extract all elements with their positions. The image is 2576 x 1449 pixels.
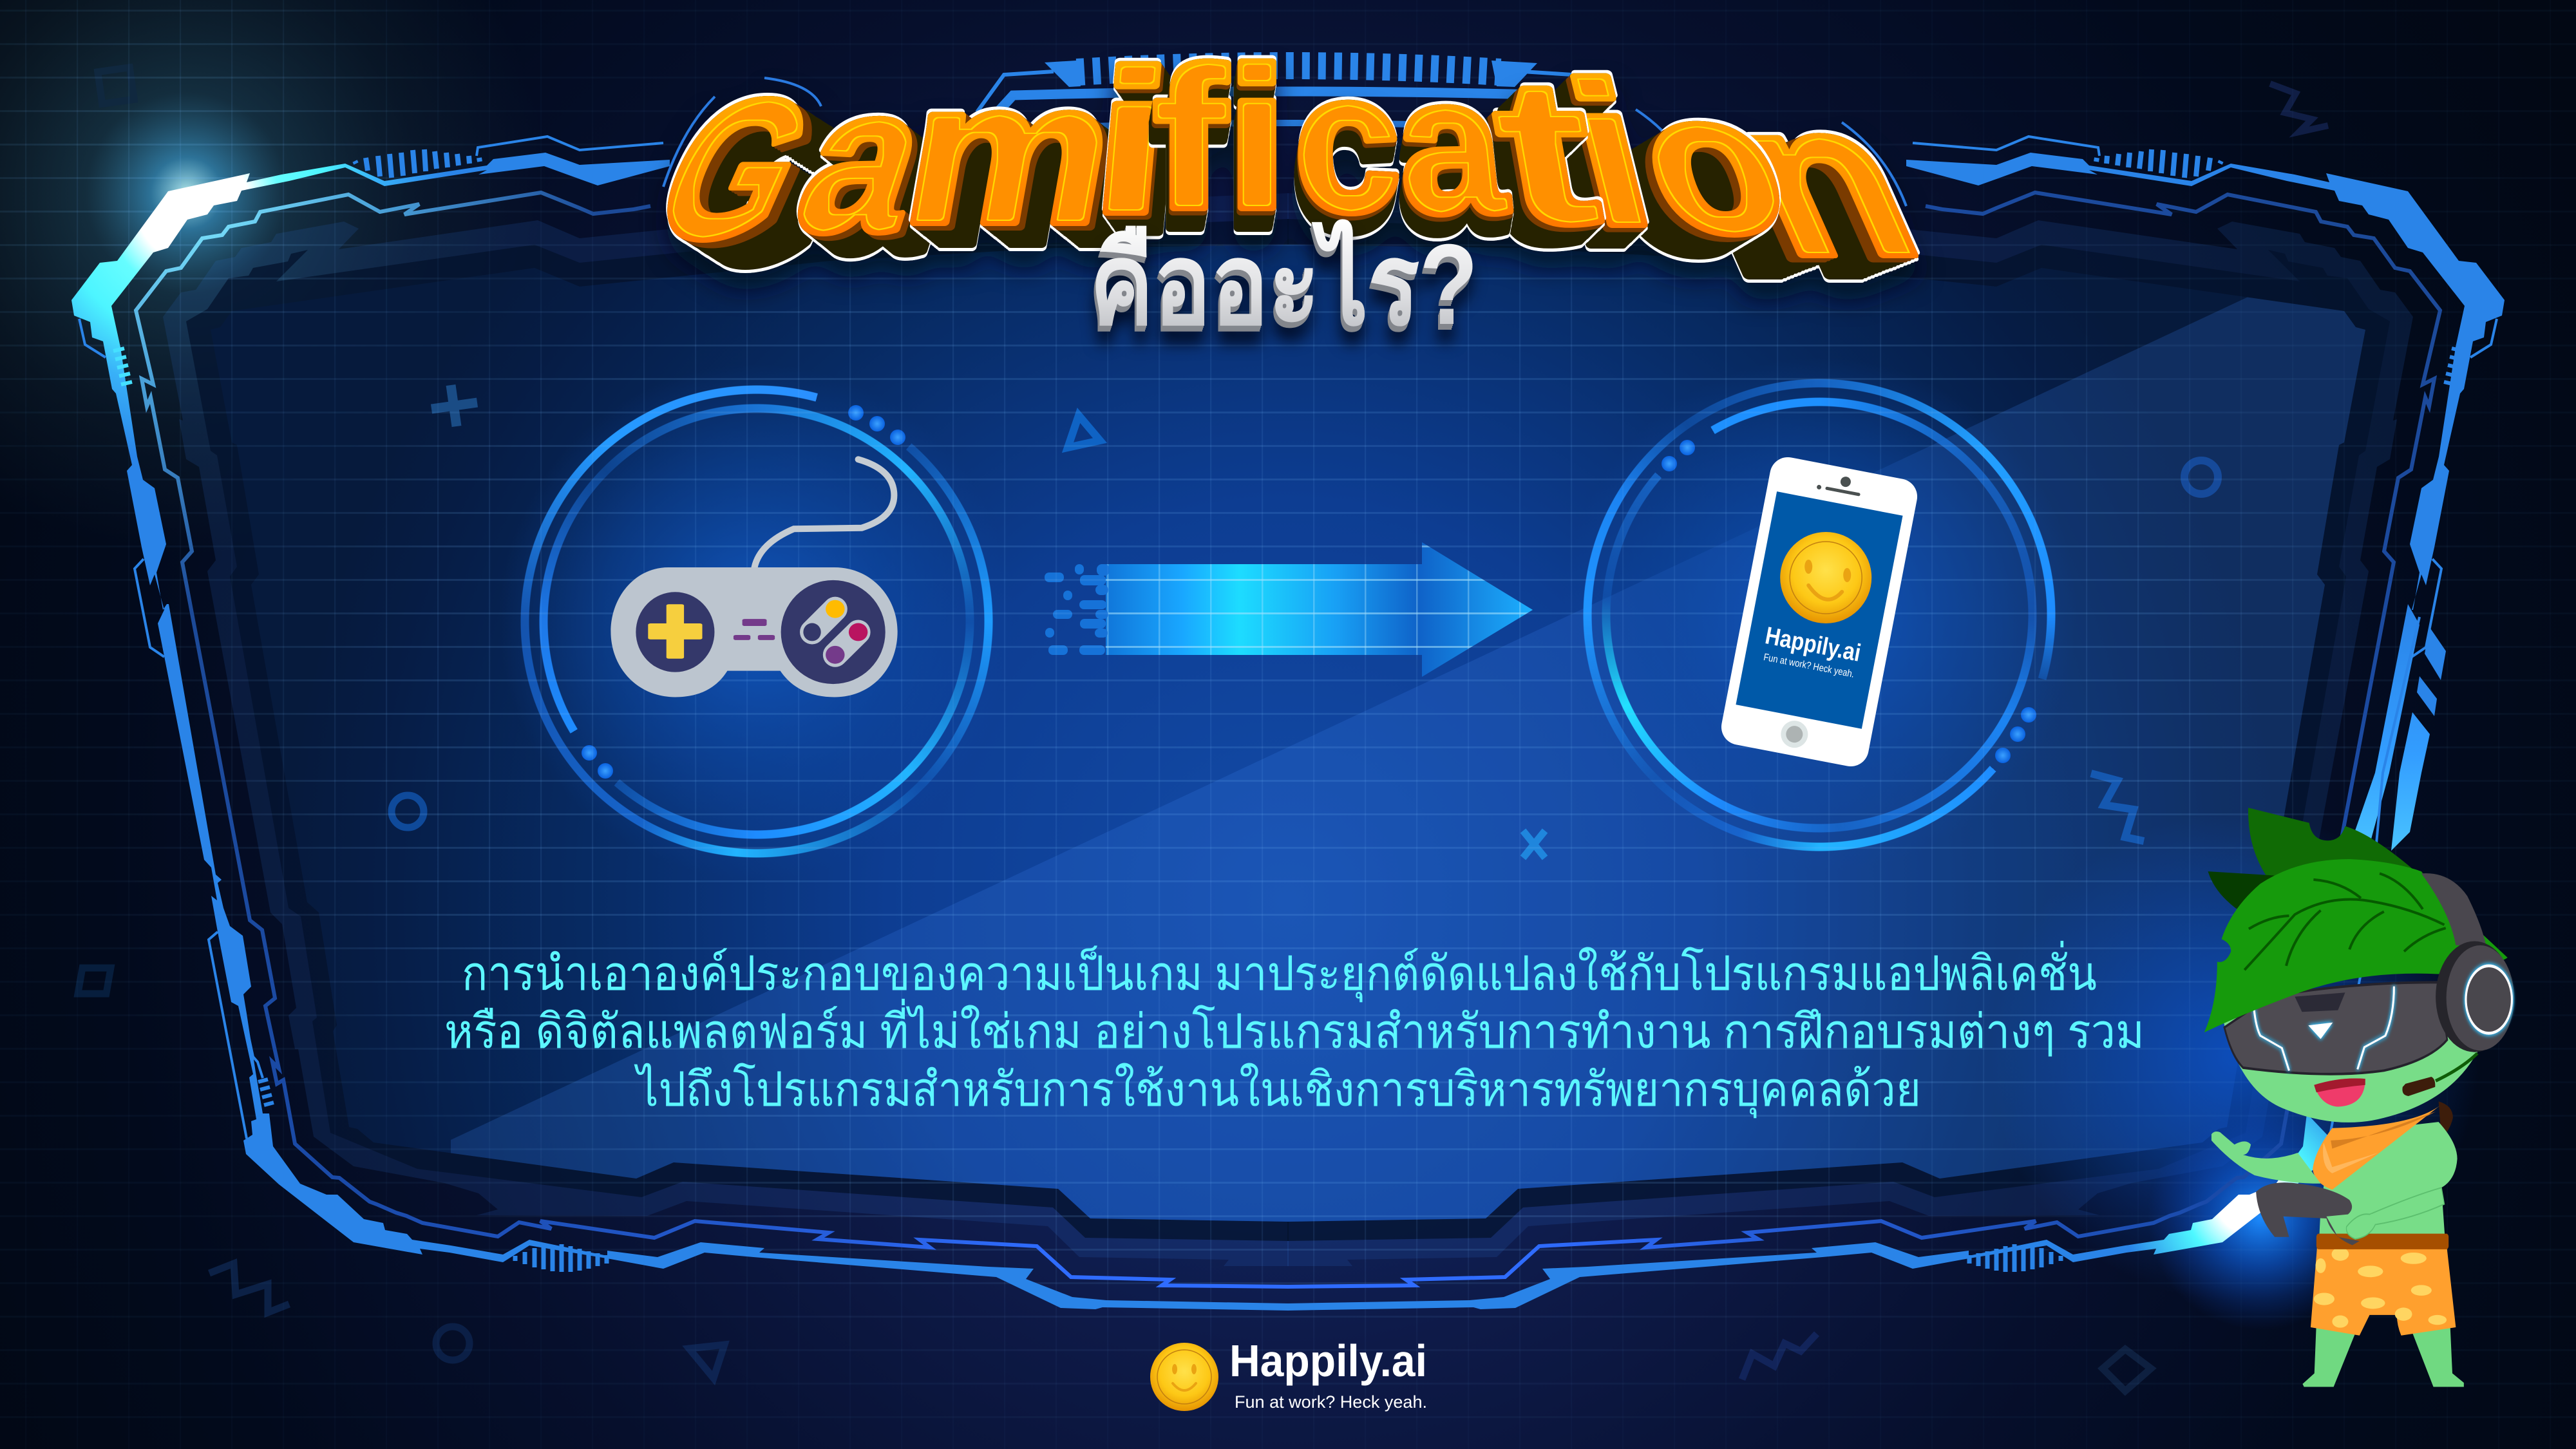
title: Gamification: a [1387, 37, 1514, 253]
icon: smartphone with Happily.ai app: Fun at work? Heck yeah. [1763, 652, 1855, 680]
title: Gamification: fi [1153, 26, 1287, 251]
logo: Happily.ai [1150, 1336, 1427, 1412]
central panel with layered bands [163, 193, 2479, 1340]
coin [1150, 1343, 1218, 1411]
head [2223, 978, 2508, 1122]
left arm [2211, 1132, 2321, 1184]
cable [755, 459, 894, 567]
leaf hat [2204, 859, 2508, 1032]
title: Gamification: a [774, 44, 957, 275]
background decorative shapes [78, 68, 2328, 1391]
select and start [734, 619, 775, 640]
outer frame left half [71, 137, 1289, 1311]
icon: smartphone with Happily.ai app: Happily.ai [1763, 622, 1863, 667]
headphones [2421, 873, 2514, 1052]
action buttons [781, 580, 886, 684]
belt [2316, 1234, 2448, 1249]
scarf [2313, 1106, 2440, 1189]
right arm [2346, 1188, 2445, 1239]
title: Gamification: i [1085, 28, 1179, 255]
title: Gamification: c [1290, 32, 1404, 253]
description text [444, 940, 2145, 1119]
logo: Happily.ai: Fun at work? Heck yeah. [1235, 1392, 1427, 1412]
mouth [2314, 1079, 2365, 1107]
top centre tick band [977, 61, 1599, 126]
title: Gamification [626, 26, 1949, 301]
subtitle: คืออะไร? [1090, 219, 1478, 348]
shorts [2311, 1245, 2456, 1336]
title: Gamification: t [1480, 38, 1611, 265]
icon: smartphone with Happily.ai app [1718, 454, 1920, 770]
held controller [2256, 1182, 2360, 1245]
VR visor [2224, 982, 2447, 1074]
right ring [1583, 379, 2056, 851]
legs [2302, 1323, 2464, 1387]
description text: หรือ ดิจิตัลแพลตฟอร์ม ที่ไม่ใช่เกม อย่างโปรแกรมสำหรับการทำงาน การฝึกอบรมต่างๆ รวม [444, 998, 2145, 1058]
coin logo [1780, 532, 1871, 623]
arrow: transformation from game to app [1045, 542, 1533, 677]
mascot: leaf character with VR headset [2204, 808, 2514, 1387]
back leaf [2248, 808, 2416, 896]
d-pad [636, 592, 714, 672]
title: Gamification: m [891, 40, 1132, 265]
title: Gamification: G [626, 59, 845, 279]
description text: การนำเอาองค์ประกอบของความเป็นเกม มาประยุกต์ดัดแปลงใช้กับโปรแกรมแอปพลิเคชั่น [462, 940, 2097, 1003]
title: Gamification: o [1611, 52, 1810, 274]
title: Gamification: i [1549, 41, 1671, 267]
backpack strap [2439, 1101, 2453, 1139]
right frame stripes [2351, 604, 2446, 851]
logo: Happily.ai: Happily.ai [1229, 1336, 1427, 1386]
title: Gamification: n [1697, 57, 1949, 301]
inner frame line left and right [136, 193, 2440, 1287]
microphone [2402, 1054, 2477, 1096]
outer frame right half [1287, 137, 2505, 1311]
torso [2319, 1122, 2458, 1237]
icon: game controller [611, 459, 898, 697]
description text: ไปถึงโปรแกรมสำหรับการใช้งานในเชิงการบริหารทรัพยากรบุคคลด้วย [634, 1063, 1921, 1119]
left ring [520, 385, 993, 858]
controller body [611, 567, 898, 697]
